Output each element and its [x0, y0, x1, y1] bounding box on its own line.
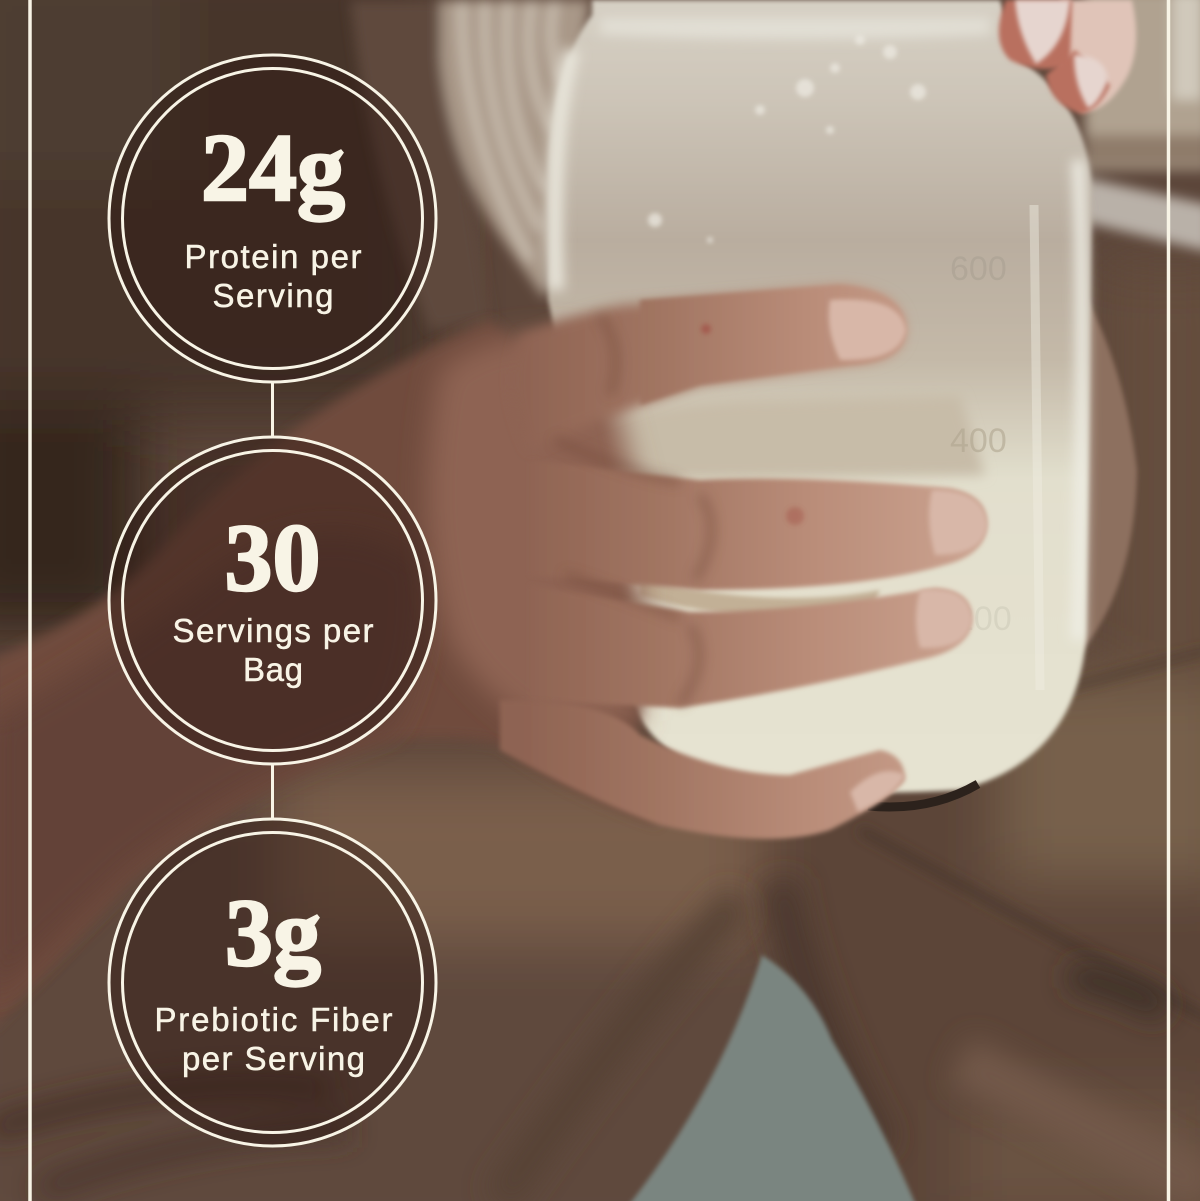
connector between circle 2 and circle 3	[271, 763, 274, 819]
window background	[1085, 0, 1200, 252]
stat badge: 3g prebiotic fiber per serving: 3g	[225, 879, 321, 986]
palm	[427, 334, 640, 740]
stat badge: 3g prebiotic fiber per serving: Prebiotic Fiber	[154, 1001, 392, 1038]
jar	[548, 0, 1092, 807]
connector between circle 1 and circle 2	[271, 381, 274, 437]
oat sediment layer	[595, 395, 985, 480]
jar measure marks: 200	[955, 600, 1012, 638]
index finger	[512, 285, 906, 450]
shirt folds	[0, 900, 740, 1200]
hair and basket	[350, 0, 590, 330]
jar droplets	[648, 35, 926, 243]
finger creases and marks	[555, 315, 711, 705]
stat badge: 3g prebiotic fiber per serving: per Serving	[182, 1040, 365, 1077]
stat badge: 24g protein per serving	[109, 55, 436, 382]
upper fingers gripping lid	[1060, 0, 1136, 112]
middle finger	[530, 460, 987, 590]
fingernails	[829, 299, 987, 812]
stat badge: 30 servings per bag: Bag	[243, 651, 303, 688]
arm sleeve right	[1078, 295, 1137, 655]
stat badge: 30 servings per bag: Servings per	[172, 612, 374, 649]
wood floor planks	[860, 650, 1200, 1020]
stat badge: 24g protein per serving: 24g	[201, 114, 345, 221]
stat badge: 30 servings per bag	[109, 437, 436, 764]
jar measure marks	[950, 250, 1012, 638]
thumb	[500, 700, 905, 839]
stat badge: 30 servings per bag: 30	[224, 504, 320, 611]
stat badge: 24g protein per serving: Serving	[212, 277, 334, 314]
jar dark base	[868, 784, 978, 807]
stat badge: 3g prebiotic fiber per serving	[109, 819, 436, 1146]
stat badge: 24g protein per serving: Protein per	[184, 238, 362, 275]
jar measure marks: 400	[950, 422, 1007, 460]
ring finger	[530, 585, 972, 708]
jeans	[625, 955, 918, 1201]
jar measure marks: 600	[950, 250, 1007, 288]
forearm and back of hand	[0, 320, 660, 1030]
